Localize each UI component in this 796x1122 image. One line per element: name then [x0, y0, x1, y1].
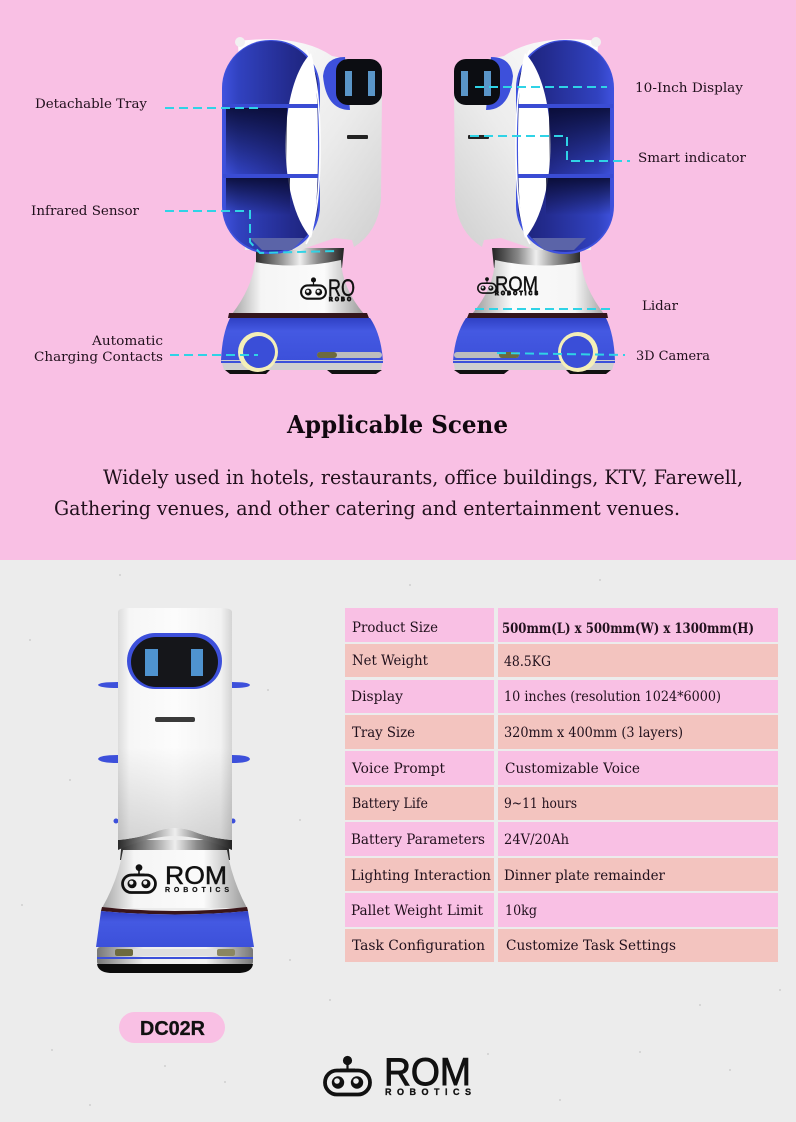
row: display: Display [351, 689, 403, 705]
row: display: 10 inches (resolution 1024*6000) [504, 689, 721, 705]
row: battery life: 9~11 hours [504, 796, 577, 812]
badge: model name: DC02R [140, 1018, 206, 1040]
row: task configuration: Task Configuration [352, 938, 485, 954]
row: net weight: Net Weight [352, 653, 429, 669]
text block: scene description: Widely used in hotels, restaurants, office buildings, KTV, Farewell, [103, 466, 743, 489]
robot logo text on right robot: ROM [495, 273, 538, 296]
robot: side view facing right [221, 37, 383, 374]
callout: automatic charging contacts: Automatic [91, 334, 163, 349]
callout: infrared sensor: Infrared Sensor [31, 204, 140, 219]
callout: automatic charging contacts [34, 334, 258, 365]
table: product specifications [345, 608, 778, 962]
row: battery life: Battery Life [352, 796, 428, 812]
icon: robot logo on left robot [301, 277, 326, 299]
display [127, 633, 222, 689]
callout: infrared sensor [31, 204, 337, 253]
callout: 3D camera: 3D Camera [636, 349, 710, 364]
row: pallet weight limit: 10kg [505, 903, 537, 919]
row: net weight: 48.5KG [504, 654, 551, 670]
robot logo text on right robot: ROBOTICS [495, 291, 539, 297]
callout: detachable tray: Detachable Tray [35, 97, 148, 112]
row: tray size: Tray Size [352, 725, 415, 741]
row: task configuration: Customize Task Settings [506, 938, 676, 954]
logo: ROM Robotics: ROM [384, 1051, 471, 1094]
tray ends [98, 682, 250, 824]
row: net weight [352, 653, 551, 670]
row: battery parameters [351, 832, 569, 848]
row: voice prompt: Customizable Voice [505, 761, 640, 777]
row: product size [352, 620, 754, 637]
badge: model name [119, 1012, 225, 1043]
callout: 10-inch display: 10-Inch Display [635, 81, 744, 96]
text block: scene description: Gathering venues, and other catering and entertainment venues. [54, 497, 680, 520]
row: battery life [352, 796, 577, 812]
robot logo text on left robot: RO [328, 275, 355, 302]
logo: ROM Robotics: ROBOTICS [385, 1087, 471, 1097]
icon: robot logo on right robot [478, 277, 496, 293]
heading: applicable scene: Applicable Scene [286, 410, 508, 439]
callout: automatic charging contacts: Charging Contacts [34, 350, 163, 365]
row: voice prompt [351, 761, 640, 777]
row: task configuration [352, 938, 676, 954]
row: tray size: 320mm x 400mm (3 layers) [504, 725, 683, 741]
row: pallet weight limit: Pallet Weight Limit [351, 903, 484, 919]
panel: pink product overview [0, 0, 796, 560]
panel: grey specification section [0, 560, 796, 1122]
row: product size: 500mm(L) x 500mm(W) x 1300mm(H) [502, 621, 754, 637]
callout: smart indicator [470, 136, 747, 166]
row: lighting interaction: Lighting Interaction [351, 868, 491, 884]
row: battery parameters: 24V/20Ah [504, 832, 569, 848]
logo text on robot: ROM [165, 862, 227, 890]
robot: side view facing left [453, 37, 615, 374]
row: battery parameters: Battery Parameters [351, 832, 485, 848]
text block: scene description [54, 466, 743, 520]
row: lighting interaction [351, 868, 666, 884]
row: voice prompt: Voice Prompt [351, 761, 446, 777]
callout: lidar: Lidar [642, 299, 679, 314]
logo text on robot: ROBOTICS [165, 887, 229, 894]
row: product size: Product Size [352, 620, 438, 636]
row: tray size [352, 725, 683, 741]
robot logo text on left robot: ROBO [329, 297, 351, 303]
row: display [351, 689, 721, 705]
robot: front view [96, 608, 254, 973]
logo: ROM Robotics [325, 1051, 471, 1097]
icon: robot logo [123, 864, 155, 893]
callout: smart indicator: Smart indicator [638, 151, 747, 166]
row: lighting interaction: Dinner plate remainder [504, 868, 666, 884]
